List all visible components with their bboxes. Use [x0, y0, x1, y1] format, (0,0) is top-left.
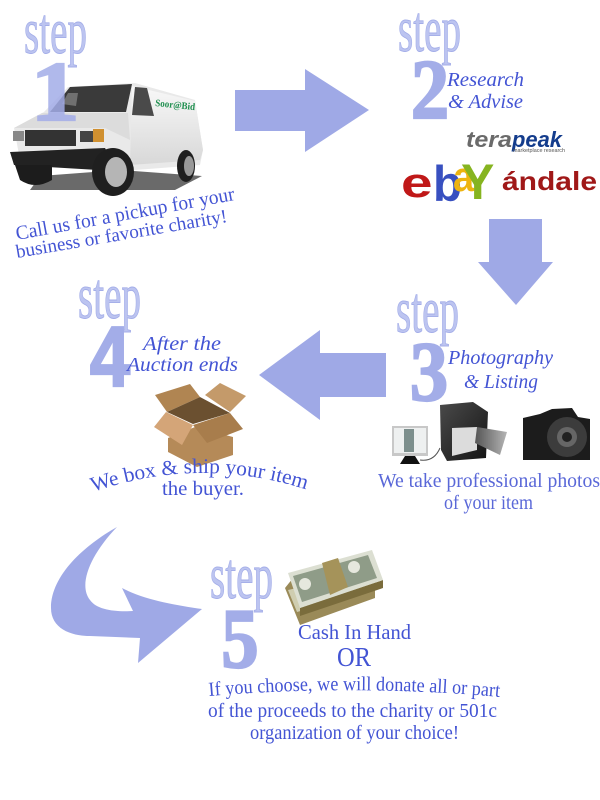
step 4 caption: the buyer. — [162, 478, 244, 500]
step 5 caption: of the proceeds to the charity or 501c — [208, 700, 497, 722]
step 4 numeral: 4 — [90, 309, 130, 404]
arrow: step 1 to step 2 — [235, 69, 369, 152]
step 3 title: Photography — [447, 347, 553, 369]
logo: terapeak: tera — [466, 127, 512, 152]
step 5 caption: organization of your choice! — [250, 722, 459, 744]
icon: stack of cash — [285, 550, 383, 625]
step 5 numeral: 5 — [221, 593, 259, 686]
logo: terapeak: peak — [511, 127, 564, 152]
step 5 cash text — [298, 620, 411, 672]
step 5 heading: step — [210, 540, 273, 613]
step 3 caption: of your item — [444, 492, 533, 514]
logo: ebay — [401, 154, 494, 212]
step 5 caption — [208, 676, 500, 744]
icon: white van — [10, 83, 203, 196]
logo: terapeak — [466, 127, 565, 154]
logo: ebay: e — [401, 159, 433, 206]
step 3 caption — [378, 470, 600, 514]
arrow: step 2 to step 3 — [478, 219, 553, 305]
step 3 title: & Listing — [464, 371, 538, 393]
arrow: curved to step 5 — [51, 527, 202, 663]
step 4 heading: step — [78, 260, 141, 333]
icon: photo light box — [440, 402, 507, 461]
icon: white van: Soor@Bid — [155, 98, 196, 113]
logo: terapeak: marketplace research — [513, 148, 565, 154]
step 2 title — [446, 69, 524, 113]
step 1 caption: business or favorite charity! — [14, 206, 229, 263]
step 1 caption: Call us for a pickup for your — [14, 183, 237, 245]
step 1 numeral: 1 — [31, 44, 79, 139]
step 4 title: Auction ends — [125, 354, 238, 376]
step 2 title: & Advise — [448, 91, 523, 113]
step 3 heading: step — [396, 274, 459, 347]
step 5 caption: If you choose, we will donate all or part — [208, 676, 500, 700]
step 2 title: Research — [446, 69, 524, 91]
icon: cardboard box — [154, 383, 246, 467]
step 2 numeral: 2 — [411, 43, 449, 137]
icon: monitor — [392, 426, 440, 464]
step 4 title: After the — [141, 333, 221, 355]
step 5 cash text: Cash In Hand — [298, 620, 411, 644]
step 3 numeral: 3 — [410, 325, 448, 419]
step 3 caption: We take professional photos — [378, 470, 600, 492]
logo: ebay: Y — [461, 154, 494, 210]
logo: ebay: b — [433, 157, 462, 212]
step 4 title — [125, 333, 238, 376]
logo: andale: ándale — [502, 166, 597, 196]
step 4 caption: We box & ship your item — [88, 458, 307, 490]
arrow: step 3 to step 4 — [259, 330, 386, 420]
logo: ebay: a — [453, 154, 475, 200]
icon: camera — [523, 408, 590, 460]
step 3 title — [447, 347, 553, 393]
step 5 cash text: OR — [337, 642, 371, 672]
